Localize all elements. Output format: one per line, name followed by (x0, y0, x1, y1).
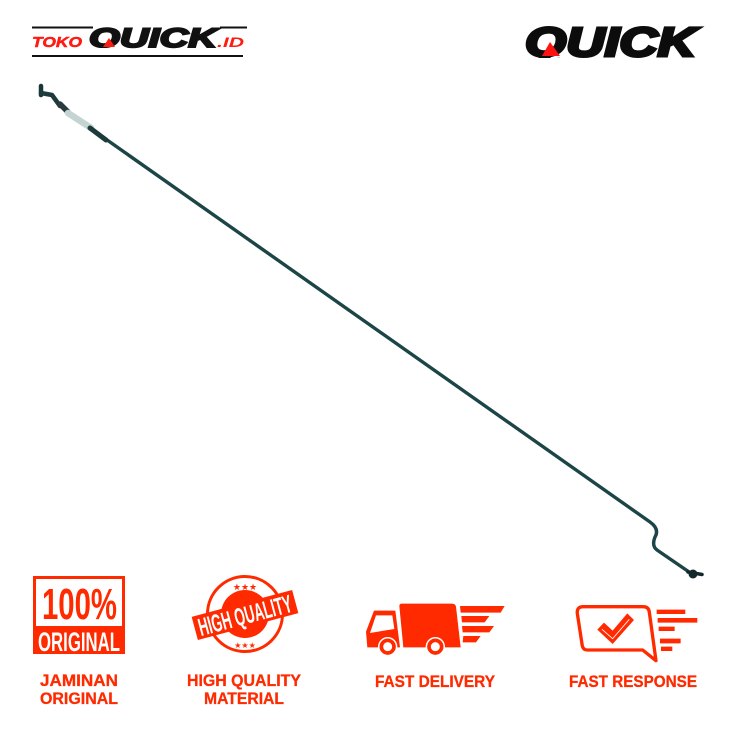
product: long rod with bent ends (41, 86, 702, 578)
label: High Quality Material: HIGH QUALITY (187, 672, 301, 690)
logo: Toko Quick ID: .ID (217, 34, 244, 50)
label: High Quality Material: MATERIAL (204, 690, 284, 708)
label: Jaminan Original (40, 672, 118, 708)
label: Fast Delivery: FAST DELIVERY (375, 673, 495, 691)
badge: high quality stamp (191, 576, 299, 652)
badge: 100% original: ORIGINAL (38, 627, 120, 657)
label: Jaminan Original: ORIGINAL (40, 690, 118, 708)
logo: Toko Quick ID (32, 23, 247, 57)
badge: high quality stamp: ★★★ (234, 641, 256, 650)
icon: chat bubble with check (577, 607, 697, 661)
logo: Toko Quick ID: TOKO (32, 34, 82, 51)
label: High Quality Material (187, 672, 301, 708)
badge: 100% original (34, 578, 125, 657)
badge: high quality stamp: HIGH QUALITY (195, 590, 295, 642)
badge: high quality stamp: ★★★ (233, 582, 257, 592)
logo: Quick: QUICK (525, 19, 700, 65)
icon: delivery truck (366, 604, 505, 656)
badge: 100% original: 100% (42, 580, 117, 629)
label: Jaminan Original: JAMINAN (40, 672, 118, 690)
label: Fast Response: FAST RESPONSE (569, 673, 697, 691)
logo: Toko Quick ID: QUICK (89, 23, 221, 53)
